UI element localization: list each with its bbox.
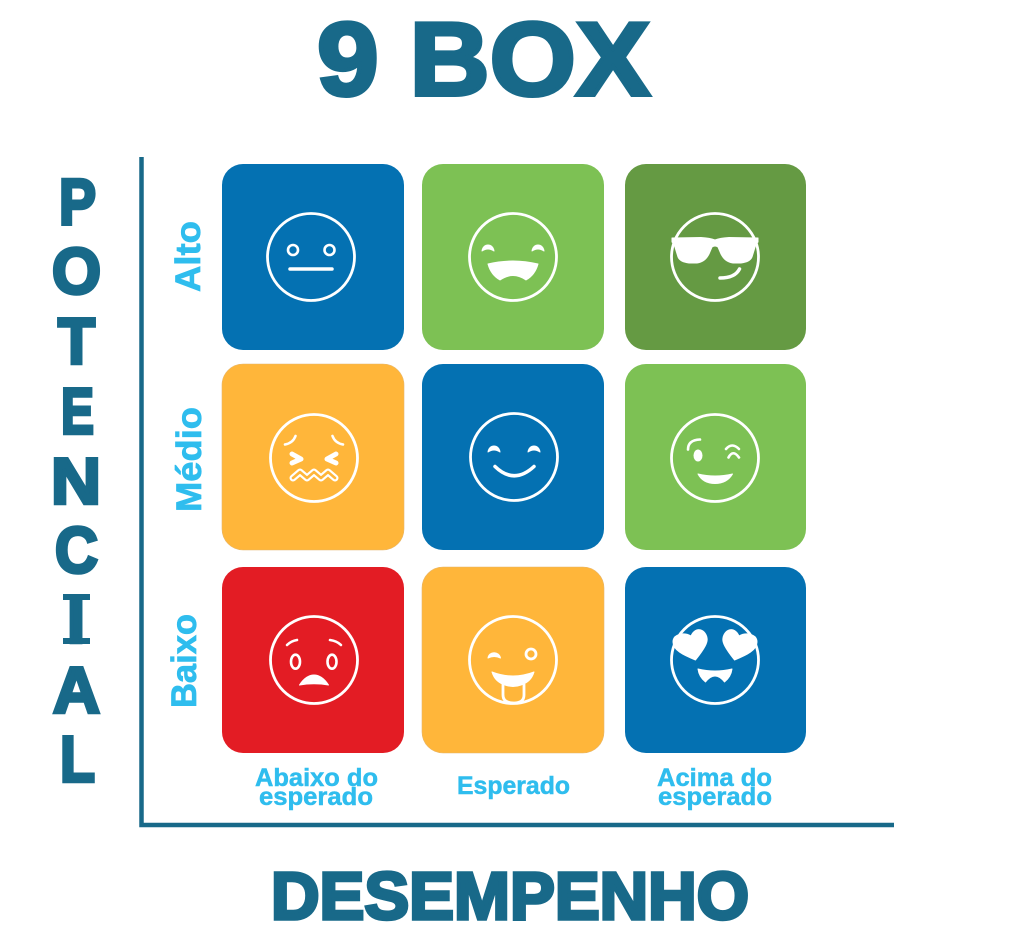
icon: confounded face	[270, 414, 358, 502]
vertical axis title: POTENCIAL: E	[61, 374, 94, 448]
column label: Acima do esperado: Acima do	[657, 764, 772, 792]
icon: neutral face	[268, 214, 354, 300]
vertical axis title: POTENCIAL: P	[59, 166, 96, 238]
vertical axis title: POTENCIAL: T	[58, 304, 95, 378]
column label: Abaixo do esperado	[255, 764, 378, 811]
box: medio potencial, acima do esperado (winking face)	[625, 364, 806, 550]
box: alto potencial, esperado (laughing face)	[422, 164, 604, 350]
vertical axis title: POTENCIAL: O	[52, 234, 101, 308]
box: alto potencial, abaixo do esperado (neutral face)	[222, 164, 404, 350]
column label: Esperado: Esperado	[457, 772, 570, 800]
title: 9 BOX	[317, 2, 650, 118]
vertical axis title: POTENCIAL: N	[51, 444, 101, 518]
vertical axis title: POTENCIAL	[51, 166, 101, 796]
icon: worried face	[270, 616, 358, 704]
vertical axis title: POTENCIAL: I	[67, 584, 85, 656]
column label: Abaixo do esperado: esperado	[259, 783, 373, 811]
icon: heart-eyes face	[672, 616, 758, 704]
column label: Acima do esperado: esperado	[658, 783, 772, 811]
box: alto potencial, acima do esperado (sunglasses face)	[625, 164, 806, 350]
horizontal axis title: DESEMPENHO: DESEMPENHO	[271, 859, 749, 934]
row label: Baixo: Baixo	[165, 614, 204, 708]
vertical axis title: POTENCIAL: C	[55, 514, 98, 586]
box: medio potencial, abaixo do esperado (confounded face)	[222, 364, 404, 550]
box: baixo potencial, acima do esperado (heart-eyes face)	[625, 567, 806, 753]
icon: laughing face	[470, 214, 556, 300]
icon: winking face	[672, 414, 758, 502]
icon: sunglasses face	[672, 214, 758, 300]
icon: tongue-out face	[470, 616, 556, 704]
vertical axis title: POTENCIAL: A	[53, 654, 100, 726]
chart axes	[142, 157, 894, 825]
box: baixo potencial, abaixo do esperado (worried face)	[222, 567, 404, 753]
vertical axis title: POTENCIAL: L	[60, 722, 95, 796]
row label: Alto: Alto	[169, 221, 208, 292]
row label: Médio: Médio	[170, 407, 209, 512]
column label: Abaixo do esperado: Abaixo do	[255, 764, 378, 792]
column label: Acima do esperado	[657, 764, 772, 811]
box: medio potencial, esperado (smiling face)	[422, 364, 604, 550]
box: baixo potencial, esperado (tongue-out face)	[422, 567, 604, 753]
icon: smiling face	[470, 414, 558, 500]
